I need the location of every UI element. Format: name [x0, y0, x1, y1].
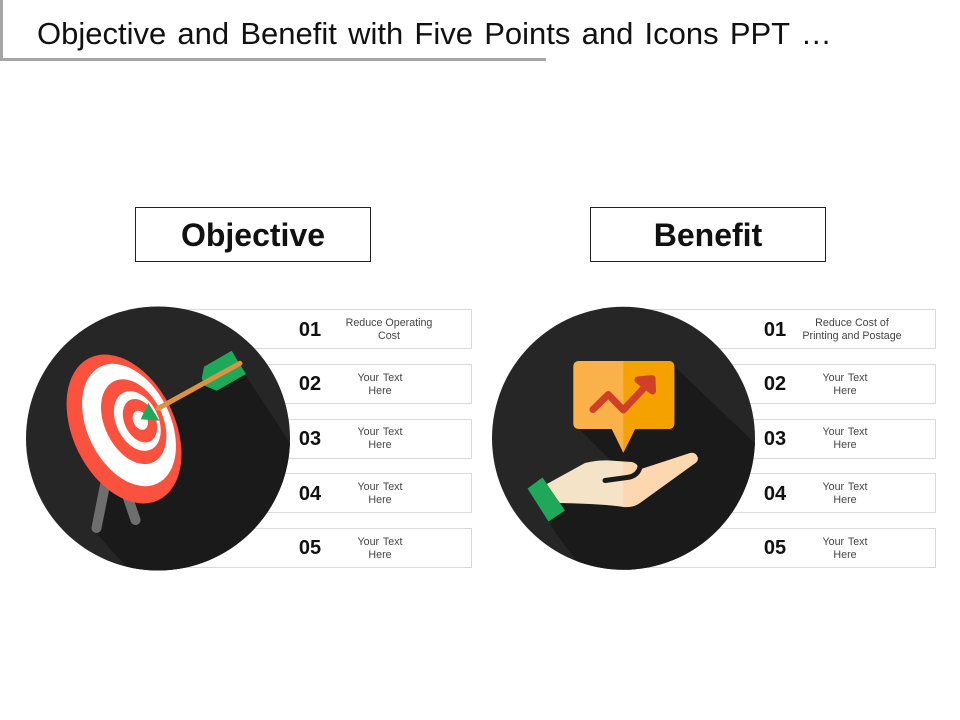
target rings [44, 336, 204, 522]
row 01: Printing and Postage [802, 330, 902, 342]
growth arrow [593, 378, 652, 410]
speech bubble [573, 361, 674, 453]
heading: benefit [590, 208, 826, 262]
row 05: Your Text [358, 536, 403, 548]
row 03 [646, 420, 936, 458]
row 05: 05 [299, 537, 321, 559]
heading: benefit: Benefit [654, 217, 763, 253]
row 04: Here [368, 494, 392, 506]
row 05: Here [833, 549, 857, 561]
title frame [2, 0, 546, 60]
row 01: Cost [378, 330, 400, 342]
hand [545, 453, 698, 507]
heading: objective: Objective [181, 217, 325, 253]
row 04: Your Text [358, 481, 403, 493]
row 02: Here [368, 385, 392, 397]
row 04 [646, 474, 936, 512]
row 02: 02 [299, 373, 321, 395]
list: objective points [180, 310, 472, 568]
row 03: Your Text [358, 426, 403, 438]
row 01: Reduce Operating [346, 317, 432, 329]
row 01: Reduce Cost of [815, 317, 889, 329]
row 02 [180, 364, 472, 404]
row 03 [180, 420, 472, 458]
row 03: Here [368, 439, 392, 451]
row 03: 03 [299, 428, 321, 450]
row 04 [180, 474, 472, 512]
heading: objective [136, 208, 370, 262]
row 05: Your Text [823, 536, 868, 548]
row 02: 02 [764, 373, 786, 395]
row 05 [180, 528, 472, 568]
row 02: Your Text [823, 372, 868, 384]
target legs [96, 485, 136, 528]
row 03: 03 [764, 428, 786, 450]
row 01: 01 [764, 319, 786, 341]
cuff [528, 478, 565, 522]
row 04: Here [833, 494, 857, 506]
row 04: 04 [299, 483, 322, 505]
row 02: Here [833, 385, 857, 397]
row 01 [180, 310, 472, 348]
row 02 [646, 364, 936, 404]
row 05: 05 [764, 537, 786, 559]
row 03: Your Text [823, 426, 868, 438]
icon: hand with growth bubble [492, 307, 760, 580]
row 01 [646, 310, 936, 348]
row 05 [646, 528, 936, 568]
icon: target with arrow [26, 306, 290, 570]
row 03: Here [833, 439, 857, 451]
title: Objective and Benefit with Five Points and Icons PPT … [37, 16, 832, 51]
row 04: Your Text [823, 481, 868, 493]
row 02: Your Text [358, 372, 403, 384]
arrow [141, 351, 246, 421]
list: benefit points [646, 310, 936, 568]
row 04: 04 [764, 483, 787, 505]
row 01: 01 [299, 319, 321, 341]
row 05: Here [368, 549, 392, 561]
